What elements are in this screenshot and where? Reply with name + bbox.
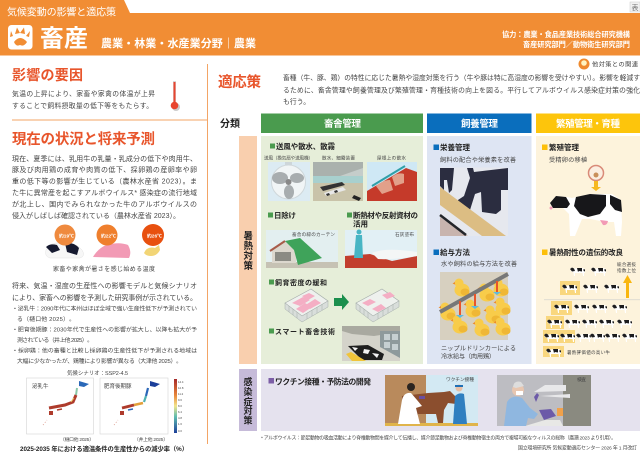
pig temperature badge: 約22℃ [101, 232, 116, 240]
image labels: 散水、細霧装置 [322, 154, 355, 162]
projection intro text: 将来、気温・湿度の生産性への影響モデルと気候シナリオ [12, 281, 197, 290]
sector title: 畜産 [40, 26, 88, 52]
icon: embryo [588, 166, 604, 180]
icon: fan [268, 162, 310, 201]
selection index label [617, 261, 636, 274]
illustration: smart barn [342, 326, 400, 361]
heading: shading: 日除け [274, 210, 296, 220]
illustration: holstein cow [550, 194, 622, 236]
heading: stocking density [269, 278, 327, 287]
row tag: heat measures: 策 [244, 260, 254, 272]
map colour scale: 0.0 [178, 429, 182, 433]
illustration: roof sprinkling [367, 162, 417, 201]
row tag: infection measures: 感 [244, 376, 253, 387]
row tag: infection measures: 染 [244, 386, 253, 397]
map: dairy cattle: 泌乳牛 [32, 382, 49, 390]
row tag: heat measures: 対 [244, 250, 254, 262]
map: fattening pigs: 肥育後期豚 [104, 382, 132, 390]
illustration: limewash [345, 230, 417, 268]
column header: housing management: 畜舎管理 [324, 118, 361, 130]
map: dairy cattle [26, 378, 94, 434]
heading: adaptation: 適応策 [218, 73, 262, 91]
heading: vaccination: ワクチン接種・予防法の開発 [275, 376, 371, 386]
heading: stocking density: 飼育密度の緩和 [275, 278, 327, 287]
series title tab: 気候変動の影響と適応策 [7, 6, 116, 18]
illustration: green curtain: 畜舎の緑のカーテン [292, 231, 335, 238]
projection bullets: ・泌乳牛：2090年代に本州はほぼ全域で強い生産性低下が予測されてい [12, 304, 197, 312]
factors text: することで飼料摂取量の低下等をもたらす。 [12, 101, 153, 110]
illustration: laboratory testing: 検査 [577, 376, 586, 383]
nipple drinker caption [441, 346, 516, 360]
projection bullets: 大幅に少なかったが、鶏種により影響が異なる（大津他 2025）。 [17, 357, 182, 365]
legend: heat tolerant cow [543, 346, 610, 357]
map colour scale: 6.4 [178, 410, 182, 414]
map colour scale: 12.8 [178, 386, 184, 390]
generation separator [544, 298, 640, 301]
illustration: cattle feeding [440, 168, 508, 236]
projection bullets: る（樋口他 2025）。 [17, 315, 75, 323]
map: fattening pigs [100, 378, 168, 434]
column header: housing management [261, 114, 423, 133]
icon: thermometer [171, 81, 180, 111]
cooperating institutions: 協力：農業・食品産業技術総合研究機構 [502, 30, 631, 39]
image labels: 屋根上の散水 [377, 154, 406, 162]
current status text: 侵入がしばしば確認されている（農林水産省 2023）。 [12, 211, 180, 220]
panel: feeding management [427, 136, 532, 364]
illustration: crowded pen [285, 289, 328, 322]
icon: animal paw [8, 25, 32, 50]
selection index label: 総合選抜 [617, 261, 636, 268]
header band [0, 0, 640, 56]
illustration: cow generations [543, 268, 637, 343]
adaptation description: 畜種（牛、豚、鶏）の特性に応じた暑熱や湿度対策を行う（牛や豚は特に高湿度の影響を受けやすい）。影響を軽減す [283, 73, 640, 82]
heading: current and future: 現在の状況と将来予測 [12, 130, 155, 148]
map colour scale: 11.2 [178, 392, 184, 396]
category label: 分類 [220, 117, 240, 130]
temperature caption: 家畜や家禽が暑さを感じ始める温度 [53, 265, 155, 273]
current status text [12, 154, 197, 220]
heading: factors: 影響の要因 [12, 67, 83, 83]
icon: pig [93, 243, 130, 258]
publisher credit: 国立環境研究所 気候変動適応センター 2026 年 1 月改訂 [518, 444, 637, 452]
current status text: 重の低下等の影響が生じている（農林水産省 2023）。ま [12, 176, 197, 186]
heading: feeding method: 給与方法 [440, 247, 470, 257]
illustration: limewash: 石灰塗布 [395, 231, 414, 238]
map colour scale: 9.6 [178, 398, 182, 402]
embryo transfer text: 受精卵の移植 [549, 156, 587, 164]
illustration: misting barn [313, 162, 363, 201]
panel: housing management [261, 136, 423, 364]
illustration: green curtain [266, 230, 338, 268]
image labels: 送風（換気扇や送風機） [264, 154, 313, 162]
map colour scale: 8.0 [178, 404, 182, 408]
cow temperature badge: 約19℃ [59, 232, 74, 240]
panel: breeding management [536, 136, 640, 364]
nutrition text: 飼料の配合や栄養素を改善 [440, 156, 516, 164]
icon: chick [144, 245, 160, 256]
sector subtitle: 農業・林業・水産業分野｜農業 [101, 36, 256, 50]
feeding method text: 水や飼料の給与方法を改善 [441, 260, 517, 268]
row tag: infection measures [239, 369, 257, 431]
illustration: vaccination [385, 375, 478, 426]
current status text: が北上し、国内でみられなかった牛のアルボウイルスの [12, 200, 197, 208]
heading: insulating materials [347, 210, 418, 228]
row tag: infection measures: 策 [244, 414, 253, 426]
panel: infection measures [261, 369, 640, 431]
heading: insulating materials: 活用 [353, 218, 368, 228]
heading: ventilation and misting: 送風や散水、散霧 [276, 141, 336, 151]
map colour scale: 4.8 [178, 416, 182, 420]
nipple drinker caption: 冷水給与（肉用鶏） [441, 352, 495, 360]
map colour scale: 14.4 [178, 380, 184, 384]
current status text: 現在、夏季には、乳用牛の乳量・乳成分の低下や肉用牛、 [12, 154, 197, 163]
adaptation description [283, 73, 640, 106]
illustration: spacious pen [356, 289, 399, 322]
column header: breeding management: 繁殖管理・育種 [556, 118, 620, 130]
current status text: 豚及び肉用鶏の成育や肉質の低下、採卵鶏の産卵率や卵 [12, 165, 197, 174]
climate scenario label: 気候シナリオ：SSP2-4.5 [67, 369, 128, 377]
map title: 2025-2035 年における適温条件の生産性からの減少率（%） [20, 444, 188, 453]
cooperating institutions [502, 30, 631, 49]
column header: feeding management [427, 114, 532, 133]
arrow: to lower density [334, 294, 349, 310]
current status text: た牛に異常産を起こすアルボウイルス* 感染症の流行地域 [12, 188, 197, 197]
map colour scale [174, 379, 184, 433]
livestock heat temperature illustration [46, 224, 164, 258]
selection index label: 指数上位 [617, 267, 636, 274]
arrow: genetic improvement [623, 275, 632, 298]
row tag: heat measures: 暑 [244, 231, 253, 242]
projection bullets: 測されている（井上他 2025）。 [17, 336, 93, 344]
nipple drinker caption: ニップルドリンカーによる [441, 346, 516, 352]
projection intro text [12, 281, 197, 302]
section divider [12, 120, 207, 121]
map citations: （井上他 2025） [134, 436, 168, 443]
legend: link to other measures [578, 58, 638, 70]
arrow: transfer down [591, 181, 601, 191]
illustration: laboratory testing [497, 375, 591, 426]
column divider [207, 64, 208, 444]
row tag: heat measures [239, 136, 257, 364]
image labels [264, 154, 406, 162]
factors text [12, 89, 155, 110]
illustration: nipple drinker chicks [438, 272, 510, 340]
chick temperature badge: 約26℃ [147, 232, 162, 240]
map colour scale: 1.6 [178, 422, 182, 426]
adaptation description: るために、畜舎管理や飼養管理及び繁殖管理・育種技術の向上を図る。平行してアルボウイルス感染症対策の強化 [283, 86, 640, 94]
legend: heat tolerant cow: 暑熱評価値の高い牛 [567, 349, 610, 356]
projection bullets: ・採卵鶏：他の畜種と比較し採卵鶏の生産性低下が予測される地域は [12, 346, 197, 354]
heading: reproduction: 繁殖管理 [549, 142, 580, 152]
row tag: infection measures: 症 [244, 397, 253, 407]
illustration: vaccination: ワクチン接種 [446, 376, 474, 383]
heading: smart barn: スマート畜舎技術 [275, 327, 335, 336]
row tag: infection measures: 対 [244, 405, 253, 416]
column header: feeding management: 飼養管理 [461, 118, 498, 130]
factors text: 気温の上昇により、家畜や家禽の体温が上昇 [12, 89, 155, 98]
cooperating institutions: 畜産研究部門／動物衛生研究部門 [523, 40, 630, 49]
footnote: * アルボウイルス：節足動物の吸血活動により脊椎動物間を媒介して伝播し、媒介節足動物および脊椎動物宿主の両方で複場可能なウィルスの総称（廣瀬 2023 より引用）。 [261, 434, 616, 442]
projection bullets [12, 304, 197, 365]
column header: breeding management [536, 114, 640, 133]
adaptation description: も行う。 [283, 97, 310, 106]
legend: link to other measures: 他対策との関連 [592, 60, 638, 68]
row tag: heat measures: 熱 [244, 240, 254, 252]
corner mark [630, 2, 640, 12]
corner mark: 表 [632, 3, 638, 12]
projection intro text: により、家畜への影響を予測した研究事例が示されている。 [12, 293, 197, 302]
map citations: （樋口他 2025） [60, 436, 94, 443]
icon: resting cow [46, 243, 84, 258]
heading: insulating materials: 断熱材や反射資材の [353, 210, 418, 220]
map citations [60, 436, 168, 443]
projection bullets: ・肥育後期豚：2030年代で生産性への影響が拡大し、以降も拡大が予 [12, 326, 197, 334]
heading: heat tolerance breeding: 暑熱耐性の遺伝的改良 [549, 247, 624, 257]
heading: nutrition: 栄養管理 [440, 142, 470, 152]
